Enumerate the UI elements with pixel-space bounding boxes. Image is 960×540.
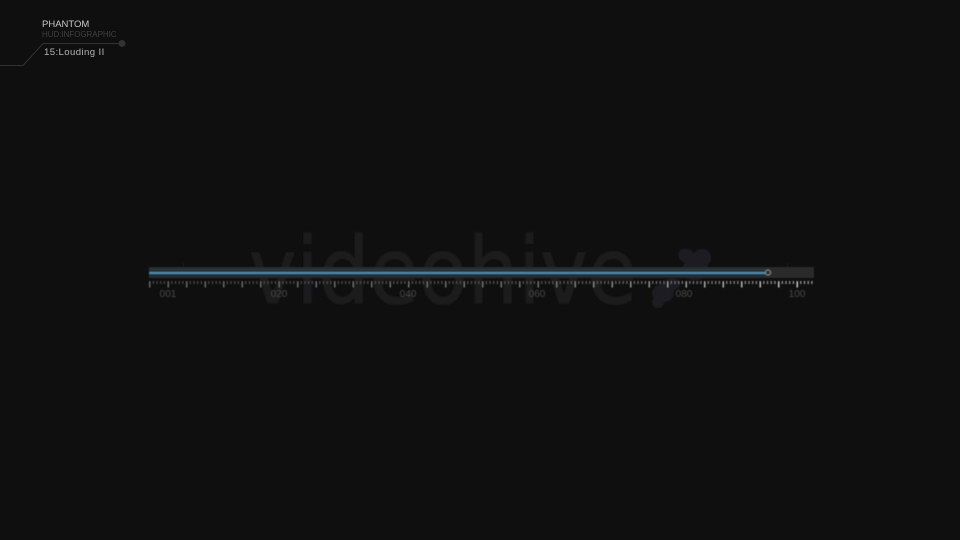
- header: title block: [0, 19, 126, 66]
- scale labels: 020: [271, 289, 288, 300]
- scale labels: 080: [676, 289, 693, 300]
- connector line with node: [0, 40, 126, 66]
- small upper markers: [184, 263, 788, 268]
- icon: watermark butterfly logo: [652, 246, 711, 308]
- subtitle: HUD:INFOGRAPHIC: [42, 30, 117, 39]
- scale labels: 060: [529, 289, 546, 300]
- progress bar: [149, 263, 814, 278]
- knob: [766, 270, 770, 275]
- watermark: videohive wordmark: videohive: [249, 218, 637, 325]
- major ticks: [149, 282, 813, 288]
- scale labels: 100: [789, 289, 806, 300]
- scale labels: [160, 289, 806, 300]
- bar filled lower blue band: [149, 274, 768, 277]
- scale labels: 040: [400, 289, 417, 300]
- title: PHANTOM: [42, 19, 89, 30]
- bar blue line: [149, 272, 768, 274]
- section label: 15:Louding II: [44, 47, 105, 58]
- minor ticks: [149, 281, 813, 284]
- bar track: [149, 267, 814, 278]
- ruler scale: [149, 282, 813, 300]
- scale labels: 001: [160, 289, 177, 300]
- bar filled top band: [149, 268, 768, 272]
